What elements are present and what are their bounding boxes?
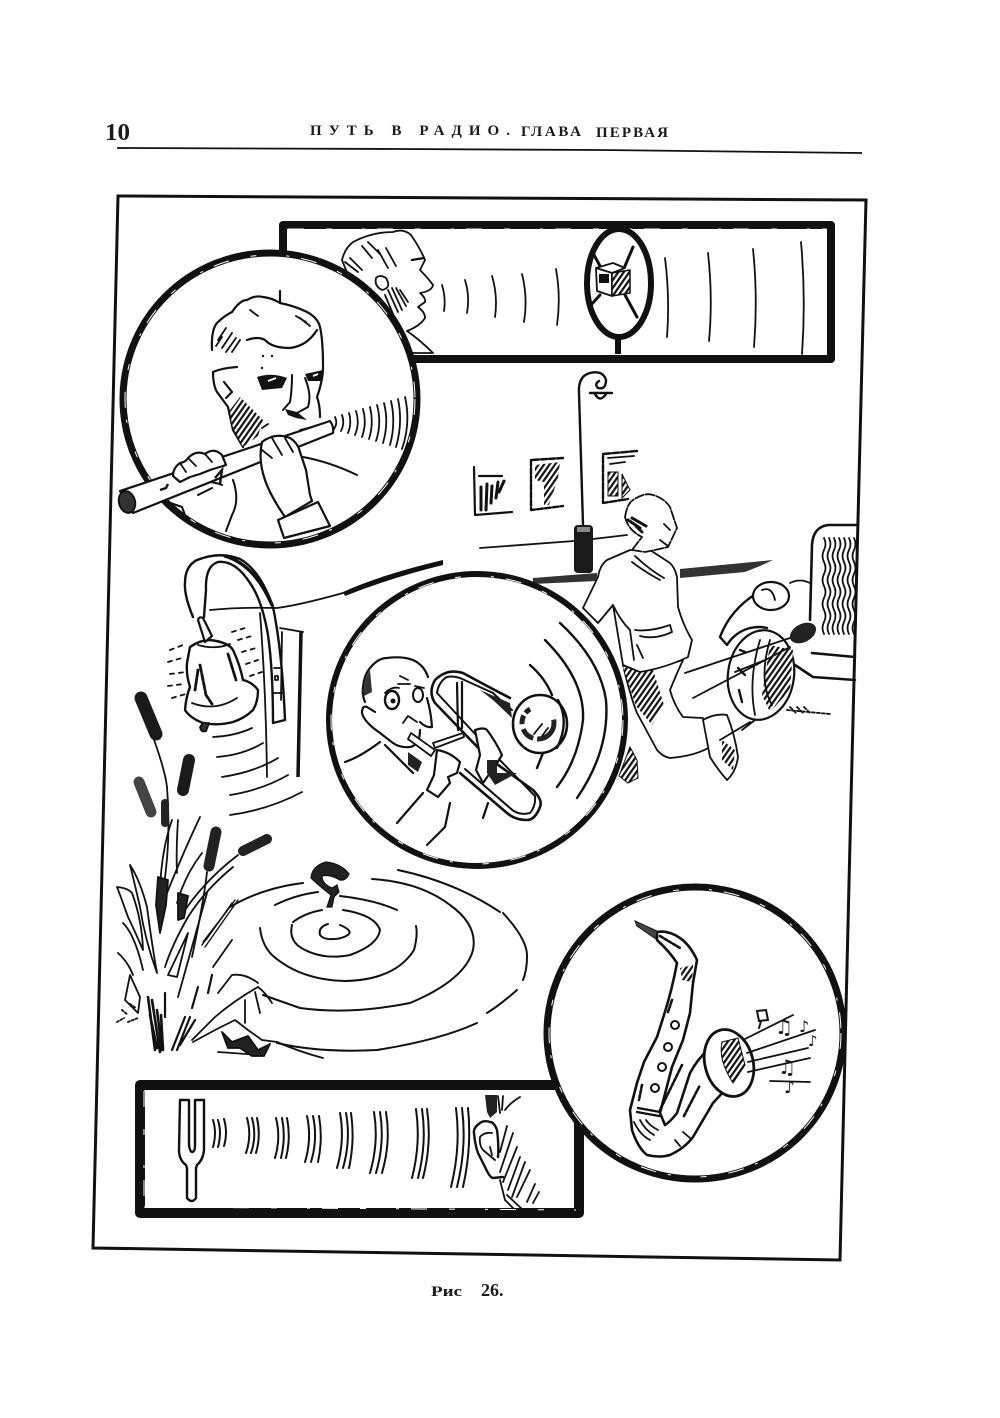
seated man at the gramophone	[583, 494, 738, 783]
nose and moustache	[283, 375, 309, 413]
jacket	[583, 550, 692, 672]
ripples on the water	[230, 870, 527, 1051]
mouthpiece	[635, 921, 657, 939]
panel: saxophone: ♪	[799, 1017, 809, 1036]
sound arcs	[530, 623, 606, 798]
cattails	[139, 698, 267, 957]
header rule	[117, 148, 862, 153]
waves between fork and ear	[213, 1108, 469, 1187]
reeds and grass	[117, 817, 272, 1052]
illustration frame	[93, 196, 866, 1260]
lamp	[574, 372, 612, 573]
radiator	[795, 525, 858, 680]
bell on a spring	[168, 555, 443, 815]
sound waves from the radio	[665, 242, 804, 354]
neck hatching	[500, 1126, 539, 1210]
page number: 10	[105, 120, 130, 146]
bell hook	[198, 617, 212, 642]
tuning fork	[179, 1100, 204, 1201]
left hand	[173, 451, 226, 482]
gramophone horn and record	[685, 580, 830, 740]
panel: saxophone: ♪	[784, 1078, 795, 1098]
wall line	[480, 535, 627, 548]
panel: saxophone: ♪	[808, 1032, 818, 1050]
panel: saxophone	[547, 887, 843, 1179]
trombone slide	[432, 672, 541, 820]
table edge	[533, 560, 773, 584]
music staff lines	[743, 1015, 815, 1082]
spring arm	[185, 555, 285, 723]
listener head	[342, 231, 433, 353]
legs	[623, 660, 710, 758]
panel border	[140, 1085, 579, 1213]
sound waves to the radio	[442, 269, 559, 325]
door frame	[260, 613, 303, 777]
bell body	[185, 640, 258, 724]
saxophone body	[630, 932, 725, 1156]
ear	[474, 1121, 503, 1178]
circle	[329, 574, 625, 866]
hands	[427, 750, 460, 797]
wire	[210, 593, 343, 610]
eyes	[257, 370, 323, 390]
running header: ПЕРВАЯ	[596, 125, 668, 141]
panel border	[283, 225, 831, 359]
panel: tuning fork and ear	[140, 1085, 579, 1213]
ringing arcs	[213, 728, 302, 815]
circle	[547, 887, 843, 1179]
mouthpiece	[408, 733, 435, 756]
right hand and cuff	[261, 436, 312, 517]
shoe	[703, 715, 738, 780]
figure caption	[431, 1280, 504, 1300]
running header	[310, 123, 668, 141]
running header: ПУТЬ В РАДИО.	[310, 123, 510, 139]
panel: saxophone: ♫	[778, 1055, 796, 1079]
circle	[123, 253, 417, 545]
panel: listener and radio loudspeaker	[283, 225, 831, 359]
notes	[757, 1010, 768, 1028]
breath sound wedge	[334, 397, 407, 449]
head outline	[212, 291, 323, 417]
keys	[671, 1021, 679, 1029]
panel: trombone player	[329, 574, 625, 866]
running header: ГЛАВА	[521, 124, 581, 140]
hair above the ear	[485, 1095, 520, 1118]
head	[625, 494, 677, 552]
vibration dashes	[168, 628, 262, 698]
figure caption: 26.	[481, 1280, 504, 1300]
flute	[120, 421, 333, 513]
panel: flute player	[116, 253, 417, 545]
pictures on the wall	[474, 451, 637, 515]
far shoe	[619, 747, 638, 783]
shore	[193, 1020, 323, 1058]
collar and shoulder	[345, 742, 488, 845]
clothes	[162, 457, 357, 531]
bell of the trombone	[513, 695, 567, 753]
beard hatching	[230, 397, 263, 447]
saxophone bell	[697, 1024, 761, 1102]
panel: saxophone: ♫	[775, 1015, 793, 1039]
player head	[362, 657, 432, 747]
radio loudspeaker	[587, 229, 651, 354]
hair	[247, 330, 317, 348]
ear	[213, 367, 243, 447]
jumping fish	[311, 862, 349, 907]
figure caption: Рис	[431, 1284, 462, 1300]
